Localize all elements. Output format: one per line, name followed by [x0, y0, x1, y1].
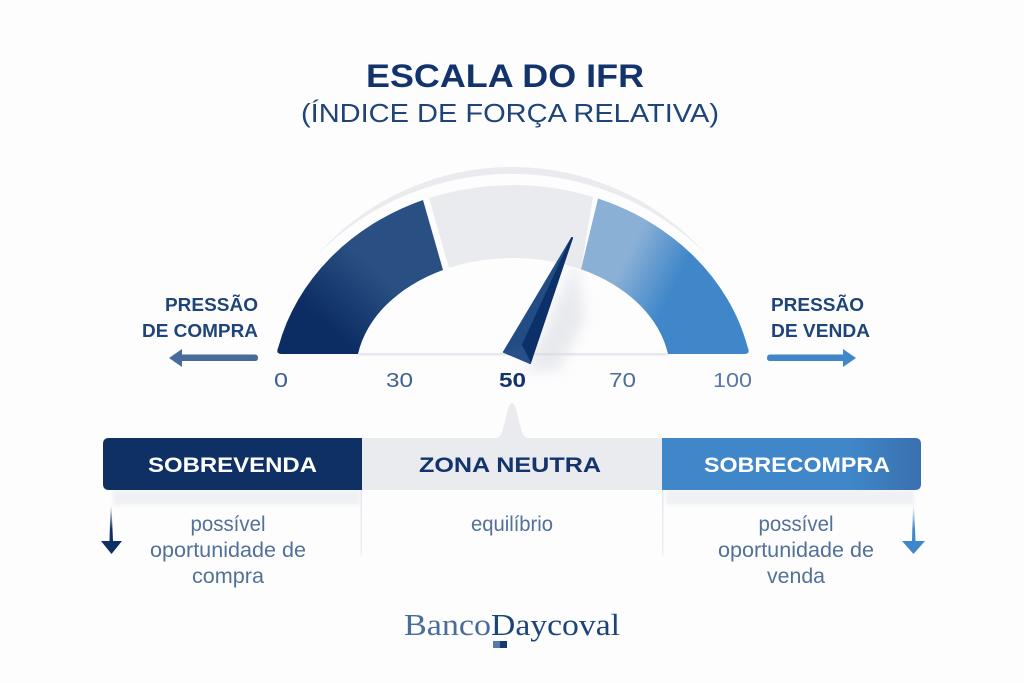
scale numbers: 0 — [274, 369, 288, 392]
text: oversold description — [150, 512, 306, 588]
gauge segment: oversold — [277, 200, 443, 354]
right pressure label: DE VENDA — [771, 321, 870, 341]
text: oversold description: compra — [192, 564, 264, 588]
logo wordmark: Daycoval — [491, 607, 620, 642]
needle shadow — [525, 260, 585, 372]
arrow: down blue — [902, 505, 925, 554]
text: oversold description: oportunidade de — [150, 538, 306, 562]
left pressure label — [142, 294, 258, 341]
text: overbought description: oportunidade de — [718, 538, 874, 562]
gauge segment: overbought — [581, 198, 749, 354]
arrow: right — [767, 349, 856, 367]
column dividers — [360, 490, 362, 556]
gauge baseline — [358, 353, 668, 356]
text: overbought description — [718, 512, 874, 588]
right pressure label: PRESSÃO — [771, 294, 864, 315]
needle — [504, 238, 572, 363]
zone labels — [148, 454, 890, 477]
scale numbers — [274, 369, 752, 392]
arrow: down dark — [101, 505, 122, 554]
scale numbers: 100 — [713, 369, 752, 392]
bar shadows — [113, 490, 914, 505]
zone labels: ZONA NEUTRA — [419, 454, 601, 477]
logo — [404, 607, 620, 648]
text: overbought description: possível — [758, 512, 834, 536]
overbought zone — [662, 438, 921, 490]
text: neutral description: equilíbrio — [471, 512, 553, 536]
neutral zone with pointer — [362, 403, 662, 490]
oversold zone — [103, 438, 362, 490]
left pressure label: DE COMPRA — [142, 321, 258, 341]
scale numbers: 50 — [499, 369, 526, 392]
gauge segment: neutral — [429, 185, 593, 269]
right pressure label — [771, 294, 870, 341]
subtitle: (ÍNDICE DE FORÇA RELATIVA) — [301, 98, 719, 128]
title: ESCALA DO IFR — [366, 58, 644, 94]
zone labels: SOBREVENDA — [148, 454, 317, 477]
zone labels: SOBRECOMPRA — [704, 454, 890, 477]
gauge — [277, 167, 749, 372]
scale numbers: 30 — [386, 369, 413, 392]
text: overbought description: venda — [767, 564, 825, 588]
scale numbers: 70 — [609, 369, 636, 392]
logo mark — [493, 641, 507, 648]
text: oversold description: possível — [190, 512, 266, 536]
left pressure label: PRESSÃO — [165, 294, 258, 315]
gauge outer decorative arc — [317, 167, 707, 255]
arrow: left — [169, 349, 258, 367]
zone bar — [103, 403, 921, 556]
logo wordmark: Banco — [404, 607, 491, 642]
